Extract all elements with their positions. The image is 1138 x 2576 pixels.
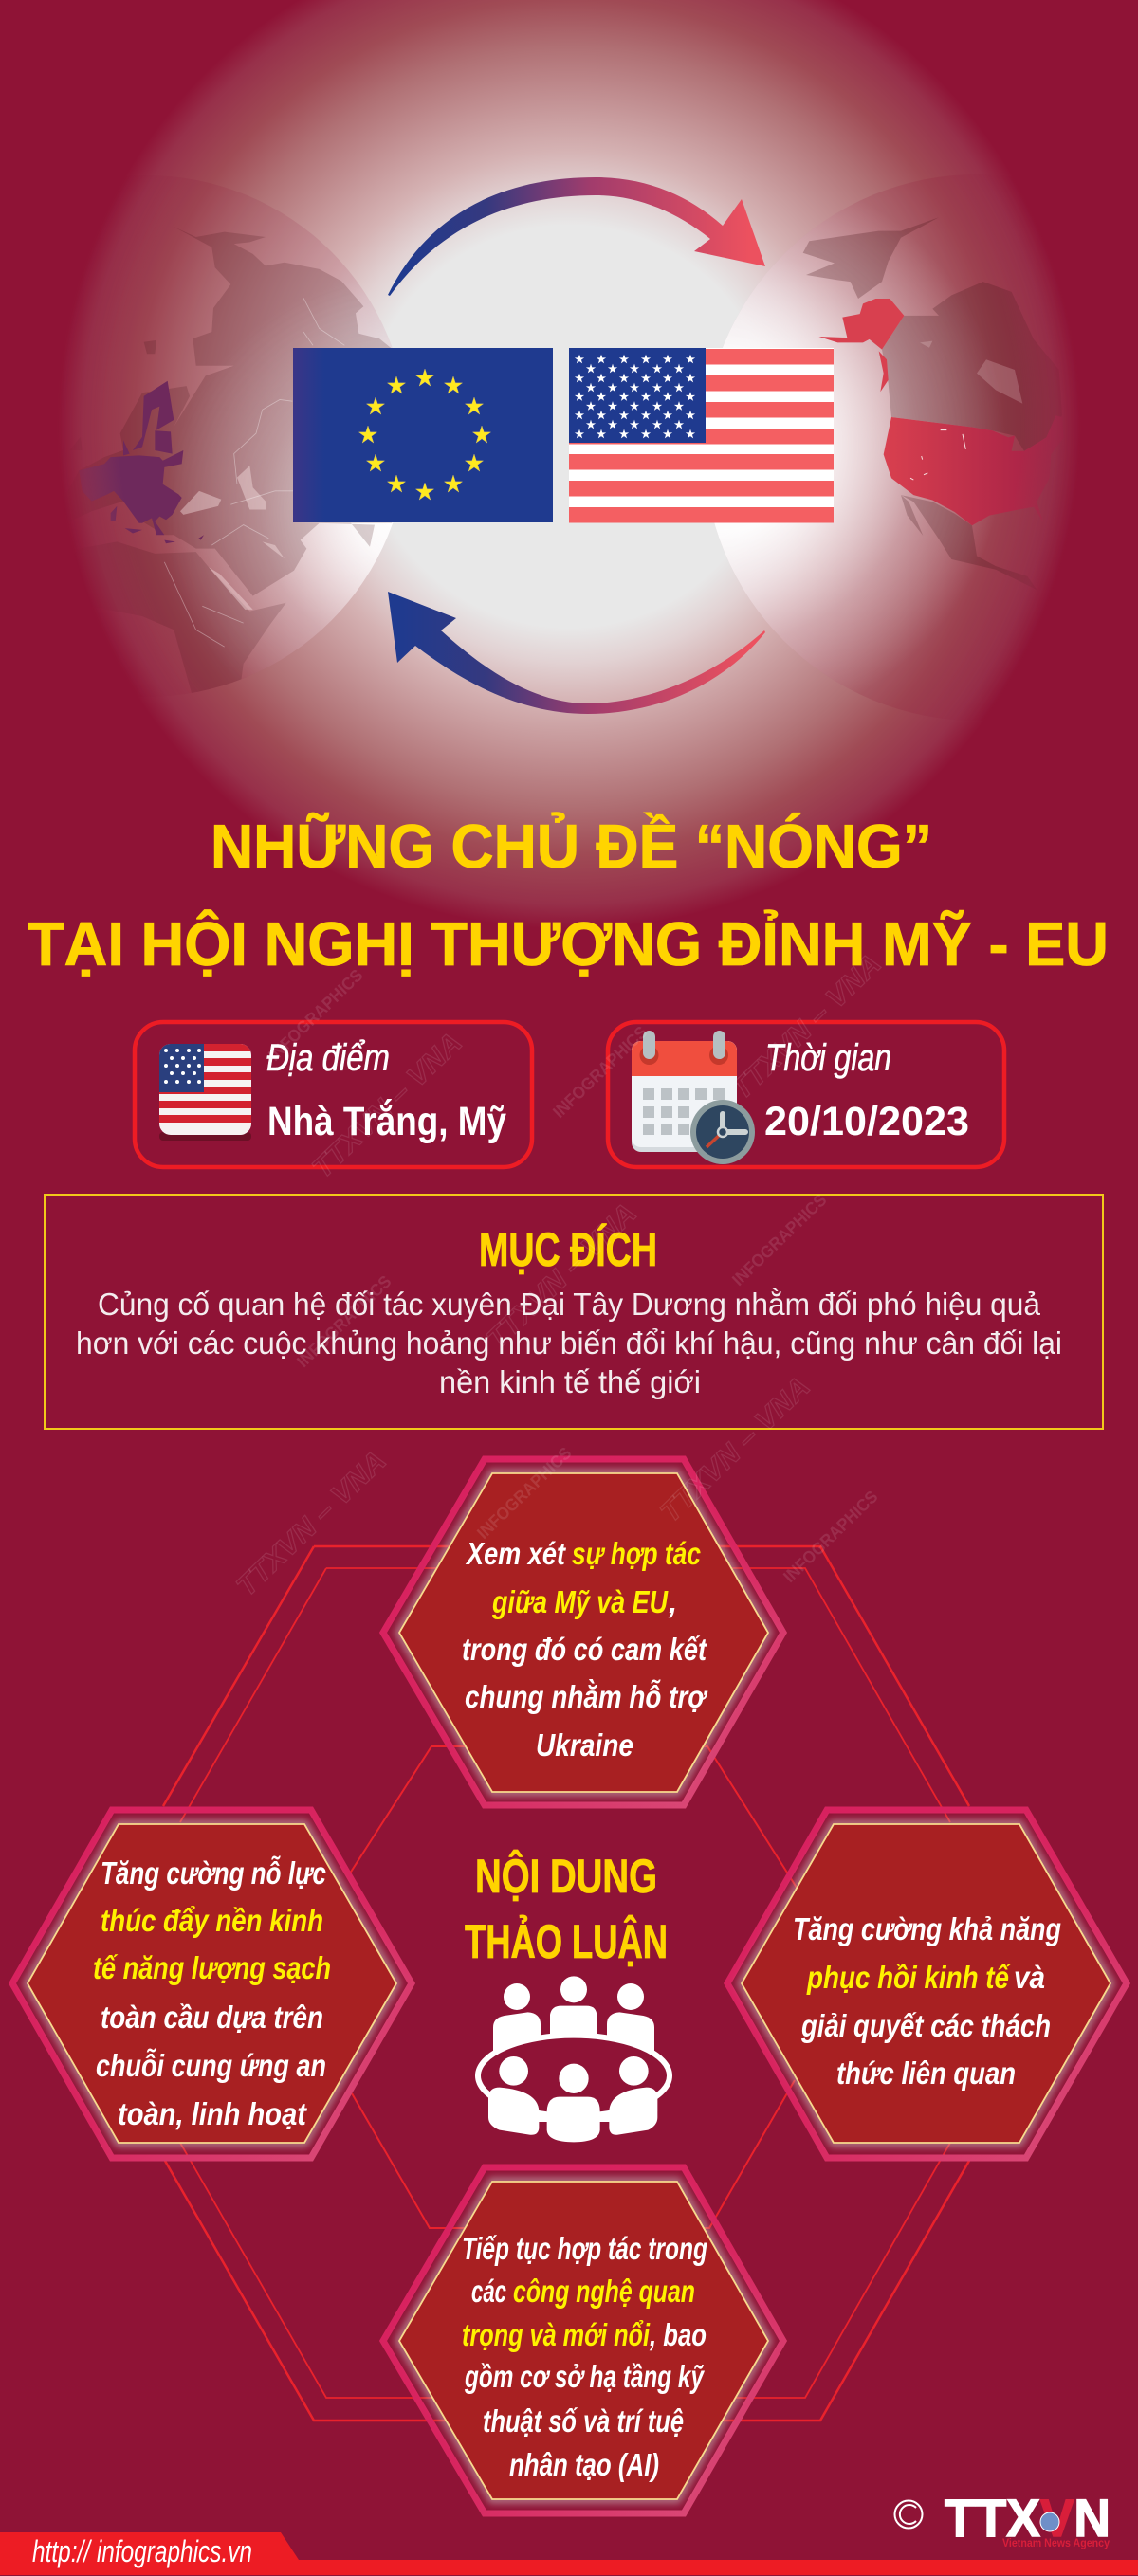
text: top hexagon: Xem xét: [465, 1536, 567, 1571]
text: right hexagon: giải quyết các thách: [800, 2008, 1051, 2043]
watermarks: TTXVN – VNA: [306, 1027, 468, 1184]
text: right hexagon: [793, 1911, 1061, 2091]
watermarks: INFOGRAPHICS: [549, 1022, 652, 1122]
arrow: EU to USA: [388, 177, 765, 296]
watermarks: INFOGRAPHICS: [473, 1443, 576, 1543]
label: time: Thời gian: [765, 1037, 891, 1079]
logo: TTXVN: Vietnam News Agency: [1002, 2536, 1110, 2549]
text: purpose body: nền kinh tế thế giới: [439, 1364, 701, 1399]
text: top hexagon: giữa Mỹ và EU: [491, 1584, 669, 1619]
watermarks: INFOGRAPHICS: [728, 1190, 831, 1289]
text: left hexagon: tế năng lượng sạch: [93, 1950, 331, 1985]
watermarks: TTXVN – VNA: [481, 1197, 643, 1355]
value: date: 20/10/2023: [764, 1099, 969, 1144]
watermarks: INFOGRAPHICS: [780, 1487, 882, 1586]
panel: location: [135, 1022, 532, 1167]
text: bottom hexagon: công nghệ quan: [513, 2274, 695, 2309]
hexagon: bottom: [383, 2167, 783, 2513]
text: top hexagon: chung nhằm hỗ trợ: [465, 1679, 708, 1714]
panel: purpose: [45, 1195, 1103, 1429]
text: purpose body: Củng cố quan hệ đối tác xuyên Đại Tây Dương nhằm đối phó hiệu quả: [98, 1287, 1041, 1322]
text: top hexagon: Ukraine: [536, 1727, 633, 1763]
watermarks: TTXVN – VNA: [654, 1371, 817, 1528]
arrow: USA to EU: [388, 592, 765, 714]
hero glow: [57, 0, 1081, 929]
text: right hexagon: Tăng cường khả năng: [793, 1911, 1061, 1946]
connector lines: [163, 1546, 969, 2421]
watermarks: TTXVN – VNA: [725, 948, 888, 1105]
globe: right with USA highlighted: [715, 177, 1058, 713]
footer band: [0, 2532, 1138, 2575]
text: purpose body: [76, 1287, 1062, 1399]
text: bottom hexagon: [462, 2231, 707, 2482]
heading: discussion topics: THẢO LUẬN: [465, 1915, 668, 1968]
text: top hexagon: [462, 1536, 708, 1763]
text: bottom hexagon: thuật số và trí tuệ: [483, 2403, 684, 2439]
value: location: Nhà Trắng, Mỹ: [267, 1098, 506, 1144]
text: left hexagon: toàn cầu dựa trên: [101, 2000, 323, 2035]
text: bottom hexagon: , bao: [649, 2317, 707, 2352]
title: NHỮNG CHỦ ĐỀ “NÓNG”: [211, 812, 932, 881]
heading: discussion topics: NỘI DUNG: [475, 1849, 657, 1903]
hexagon: top: [383, 1459, 783, 1805]
watermarks: [230, 948, 888, 1602]
text: bottom hexagon: các: [471, 2274, 506, 2309]
text: bottom hexagon: nhân tạo (AI): [509, 2447, 659, 2482]
icon: meeting table: [478, 1976, 670, 2142]
text: top hexagon: sự hợp tác: [572, 1536, 701, 1571]
text: left hexagon: [93, 1855, 331, 2131]
text: top hexagon: trong đó có cam kết: [462, 1632, 708, 1667]
text: top hexagon: ,: [668, 1584, 677, 1619]
watermarks: TTXVN – VNA: [230, 1445, 393, 1602]
watermarks: INFOGRAPHICS: [265, 965, 367, 1065]
watermarks: INFOGRAPHICS: [293, 1271, 395, 1371]
text: right hexagon: phục hồi kinh tế: [806, 1960, 1012, 1995]
flag: EU: [293, 348, 553, 522]
flag: USA: [569, 348, 834, 523]
icon: USA flag: [159, 1044, 251, 1141]
icon: calendar and clock: [632, 1031, 755, 1164]
text: bottom hexagon: gồm cơ sở hạ tầng kỹ: [464, 2359, 705, 2394]
text: right hexagon: thức liên quan: [836, 2055, 1016, 2091]
hexagon: right: [727, 1810, 1127, 2158]
panel: time: [608, 1022, 1004, 1167]
globe: left with Europe highlighted: [80, 184, 393, 693]
text: left hexagon: thúc đẩy nền kinh: [101, 1903, 323, 1938]
heading: discussion topics: [465, 1849, 668, 1968]
logo: TTXVN: TTXVN: [945, 2488, 1110, 2548]
text: bottom hexagon: Tiếp tục hợp tác trong: [462, 2231, 707, 2266]
text: purpose body: hơn với các cuộc khủng hoảng như biến đổi khí hậu, cũng như cân đối lại: [76, 1325, 1062, 1361]
text: left hexagon: chuỗi cung ứng an: [96, 2048, 326, 2083]
map: EU member states: [79, 381, 204, 543]
text: left hexagon: toàn, linh hoạt: [118, 2096, 308, 2131]
text: right hexagon: và: [1014, 1960, 1045, 1995]
text: left hexagon: Tăng cường nỗ lực: [101, 1855, 326, 1891]
text: bottom hexagon: trọng và mới nổi: [462, 2317, 651, 2352]
title: [28, 812, 1109, 978]
title: TẠI HỘI NGHỊ THƯỢNG ĐỈNH MỸ - EU: [28, 909, 1109, 978]
footer url: http:// infographics.vn: [32, 2534, 252, 2568]
label: location: Địa điểm: [266, 1037, 390, 1079]
hexagon: left: [12, 1810, 412, 2158]
heading: purpose: MỤC ĐÍCH: [479, 1223, 657, 1276]
